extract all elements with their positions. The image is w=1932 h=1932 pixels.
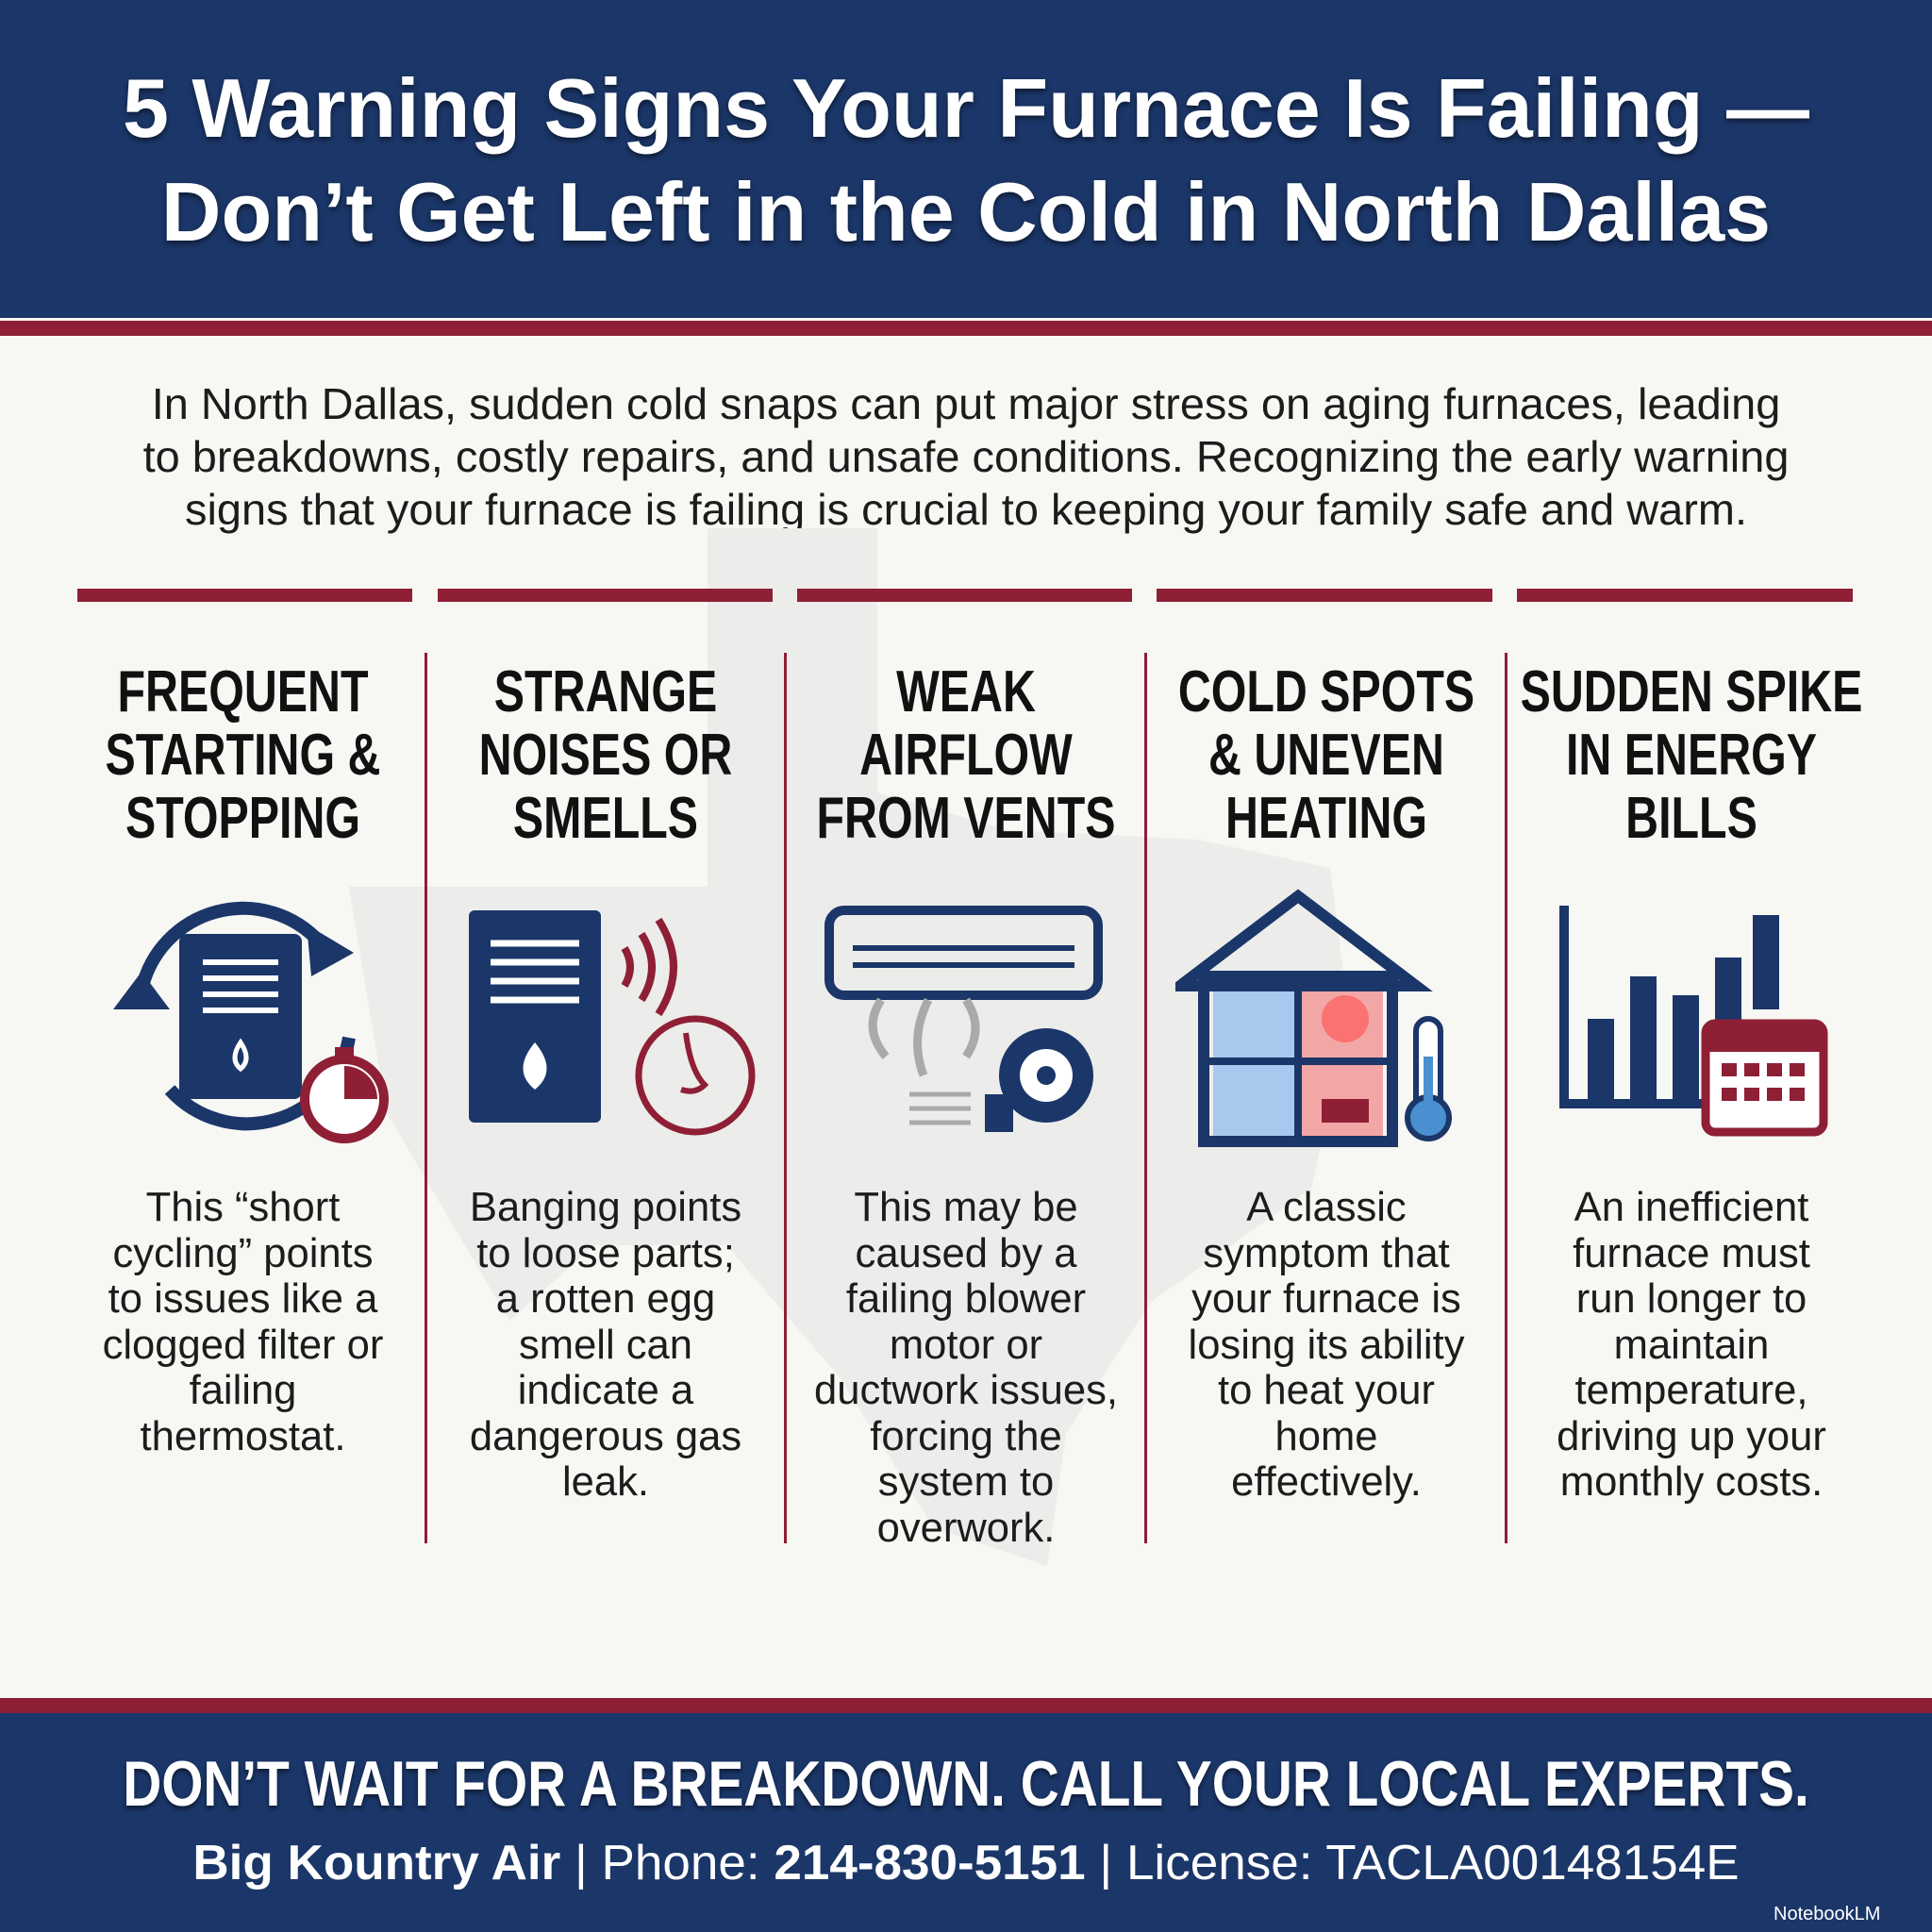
description: system to [878,1458,1054,1505]
heading: SUDDEN SPIKE [1521,659,1862,724]
header red stripe [0,321,1932,336]
icon: bar chart with calendar [1559,906,1828,1136]
heading: & UNEVEN [1208,723,1444,788]
panel: energy bills [1521,659,1862,1505]
intro text: to breakdowns, costly repairs, and unsafe conditions. Recognizing the early warning [143,432,1789,481]
header band [0,0,1932,318]
description [1189,1184,1464,1505]
description: effectively. [1231,1458,1422,1505]
heading [479,659,732,851]
heading [1178,659,1474,851]
description: leak. [562,1458,649,1505]
description: thermostat. [141,1413,345,1458]
heading [1521,659,1862,851]
footer call to action: DON’T WAIT FOR A BREAKDOWN. CALL YOUR LOCAL EXPERTS. [123,1748,1809,1820]
icon: vent and blower [824,906,1103,1132]
description: This may be [854,1184,1078,1230]
panel: weak airflow [814,659,1118,1551]
heading: STRANGE [494,659,717,724]
description: A classic [1246,1184,1407,1230]
description: Banging points [470,1184,741,1230]
heading: AIRFLOW [859,723,1073,788]
description: indicate a [518,1367,693,1413]
description: maintain [1614,1321,1769,1368]
description [1557,1184,1826,1505]
description: to loose parts; [476,1230,735,1275]
icon: house with thermometer [1175,889,1452,1147]
description [103,1184,383,1458]
description: a rotten egg [496,1275,715,1322]
title: Don’t Get Left in the Cold in North Dallas [161,165,1771,258]
description: clogged filter or [103,1321,383,1368]
intro text [143,379,1789,534]
description: overwork. [877,1504,1055,1551]
watermark: NotebookLM [1774,1904,1880,1924]
description: home [1275,1413,1377,1458]
heading: COLD SPOTS [1178,659,1474,724]
heading: HEATING [1225,786,1427,851]
description: This “short [146,1184,340,1230]
description: symptom that [1203,1230,1450,1275]
panel: cold spots [1175,659,1474,1505]
description: run longer to [1576,1275,1807,1322]
heading [816,659,1116,851]
footer band [0,1713,1932,1932]
description: forcing the [870,1413,1062,1458]
footer contact: Big Kountry Air | Phone: 214-830-5151 | License: TACLA00148154E [192,1836,1740,1890]
red bars [77,589,412,602]
icon: furnace, sound, nose [469,910,755,1136]
heading: STARTING & [106,723,380,788]
intro text: In North Dallas, sudden cold snaps can put major stress on aging furnaces, leading [152,379,1780,428]
heading [106,659,380,851]
description: monthly costs. [1560,1458,1823,1505]
panel: strange noises [469,659,755,1505]
description: your furnace is [1191,1275,1461,1322]
title [123,61,1811,258]
description: motor or [890,1321,1042,1368]
description: cycling” points [113,1230,373,1275]
panel: frequent starting [103,659,389,1458]
description: smell can [519,1321,692,1368]
description: failing [190,1367,296,1413]
description: An inefficient [1574,1184,1808,1230]
description: failing blower [846,1275,1086,1322]
description: caused by a [856,1230,1076,1275]
icon: cycling furnace [113,902,389,1143]
heading: NOISES OR [479,723,732,788]
heading: STOPPING [125,786,360,851]
description: driving up your [1557,1413,1826,1458]
footer red stripe [0,1698,1932,1713]
description: losing its ability [1189,1321,1464,1368]
heading: FREQUENT [118,659,368,724]
background texas map [349,528,1343,1566]
heading: IN ENERGY [1566,723,1817,788]
description: furnace must [1573,1230,1810,1275]
title: 5 Warning Signs Your Furnace Is Failing — [123,61,1809,155]
heading: WEAK [896,659,1036,724]
heading: BILLS [1625,786,1757,851]
description: ductwork issues, [814,1367,1118,1413]
description: to heat your [1218,1367,1435,1413]
description: temperature, [1575,1367,1807,1413]
description [814,1184,1118,1551]
description: dangerous gas [470,1413,741,1458]
description: to issues like a [108,1275,377,1322]
description [470,1184,741,1505]
heading: SMELLS [513,786,698,851]
intro text: signs that your furnace is failing is crucial to keeping your family safe and warm. [185,485,1747,534]
heading: FROM VENTS [816,786,1116,851]
